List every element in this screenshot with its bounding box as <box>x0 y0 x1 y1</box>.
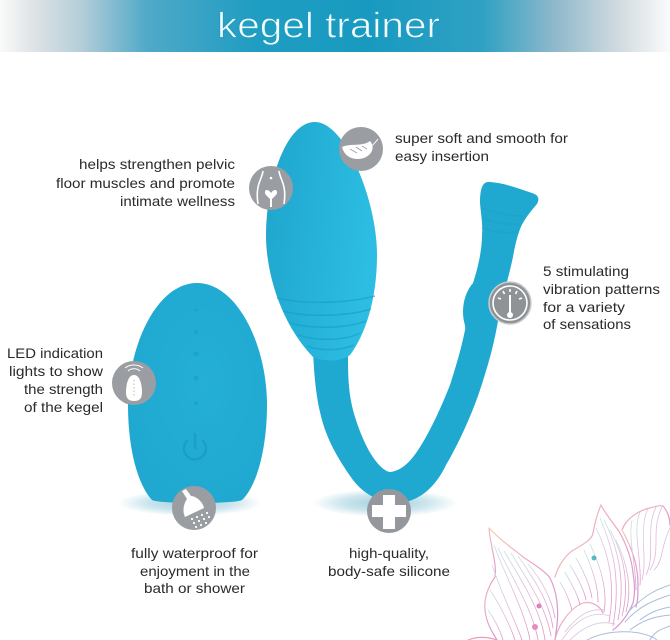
text: vibration patterns: of sensations <box>543 316 631 332</box>
text: helps strengthen: intimate wellness <box>120 193 235 209</box>
kegel egg and tail <box>266 122 538 517</box>
text: waterproof: fully waterproof for <box>131 545 258 561</box>
text: vibration patterns <box>543 263 660 332</box>
text: vibration patterns: for a variety <box>543 299 625 315</box>
remote control <box>118 283 267 516</box>
text: waterproof <box>131 545 258 596</box>
text: vibration patterns: vibration patterns <box>543 281 660 297</box>
icon: remote signal <box>112 361 156 405</box>
LED dots <box>194 308 198 405</box>
text: LED indication: of the kegel <box>24 399 103 415</box>
icon: medical cross <box>367 489 411 533</box>
text: waterproof: bath or shower <box>144 580 245 596</box>
decorative flower illustration <box>468 505 670 640</box>
text: LED indication: lights to show <box>9 363 104 379</box>
text: silicone: high-quality, <box>349 545 429 561</box>
text: LED indication: the strength <box>24 381 103 397</box>
text: helps strengthen <box>56 156 235 209</box>
text: waterproof: enjoyment in the <box>140 563 250 579</box>
text: LED indication <box>7 345 104 415</box>
title: kegel trainer <box>217 4 440 46</box>
text: soft and smooth: super soft and smooth for <box>395 130 568 146</box>
power button <box>184 433 206 459</box>
icon: gauge <box>489 282 531 324</box>
text: helps strengthen: helps strengthen pelvic <box>79 156 235 172</box>
handle ribs <box>481 208 523 233</box>
text: helps strengthen: floor muscles and promote <box>56 175 235 191</box>
egg ribs <box>277 296 375 350</box>
text: LED indication: LED indication <box>7 345 103 361</box>
text: soft and smooth: easy insertion <box>395 148 489 164</box>
title banner <box>0 0 670 52</box>
icon: shower <box>172 486 216 530</box>
text: vibration patterns: 5 stimulating <box>543 263 629 279</box>
text: silicone <box>328 545 450 579</box>
icon: feather <box>339 127 383 171</box>
icon: pelvic body <box>249 166 293 210</box>
tail <box>313 182 538 503</box>
egg body <box>266 122 377 361</box>
text: silicone: body-safe silicone <box>328 563 450 579</box>
text: soft and smooth <box>395 130 568 164</box>
